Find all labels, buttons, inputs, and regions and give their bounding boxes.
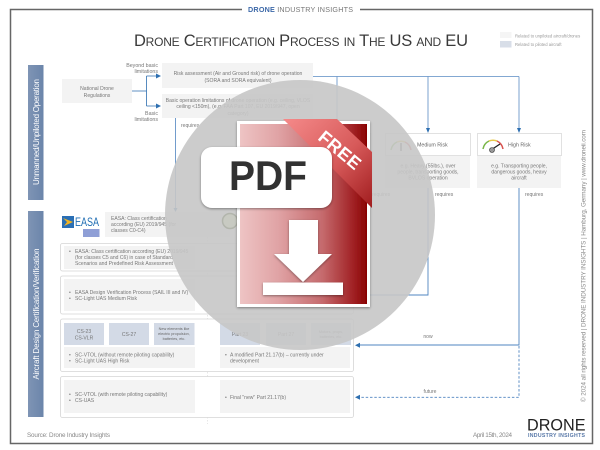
card: medium risk bbox=[385, 134, 470, 188]
text: SC-VTOL without remote piloting: SC-Light UAS High Risk bbox=[75, 358, 130, 364]
text: SC-VTOL without remote piloting: SC-VTOL (without remote piloting capability) bbox=[75, 352, 175, 358]
box: EASA class certification: classes C0-C4) bbox=[111, 228, 146, 234]
label: future: future bbox=[424, 389, 437, 395]
box: basic operation limitations: category) bbox=[227, 111, 249, 117]
box: basic operation limitations bbox=[162, 94, 313, 118]
arrow: future bbox=[355, 395, 360, 400]
arrow: beyond basic branch bbox=[156, 74, 161, 78]
box: basic operation limitations: ceiling <150m), (e.g. FAA Part 107, EU 2019/947, open bbox=[176, 104, 300, 110]
box: risk assessment: Risk assessment (Air and Ground risk) of drone operation bbox=[174, 71, 303, 77]
text: SC-VTOL without remote piloting: • bbox=[69, 352, 71, 358]
flow lines from risk assessment bbox=[313, 76, 519, 130]
national drone regulations box bbox=[62, 79, 132, 103]
sidebar: unmanned operation bbox=[28, 65, 44, 200]
title: Drone Certification Process in The US and EU bbox=[134, 32, 468, 50]
date: April 15th, 2024 bbox=[473, 432, 512, 439]
card: high risk: aircraft bbox=[511, 176, 527, 182]
spec box: new elements US: batteries, etc. bbox=[320, 335, 342, 339]
PDF label: PDF bbox=[229, 152, 307, 199]
text: final new Part 21.17(b): Final "new" Part 21.17(b) bbox=[230, 395, 286, 401]
box: basic operation limitations: Basic operation limitations of drone operation (e.g. ceiling, VLOS bbox=[166, 98, 311, 104]
spec box: new elements US bbox=[311, 323, 351, 345]
text: SC-VTOL with remote piloting: • bbox=[69, 392, 71, 398]
card: medium risk: Medium Risk bbox=[417, 142, 448, 148]
vertical copyright line: © 2024 all rights reserved | DRONE INDUSTRY INSIGHTS | Hamburg, Germany | www.droneii.com bbox=[580, 130, 588, 402]
card: medium risk: BVLOS operation bbox=[408, 176, 448, 182]
box: EASA class certification: according (EU) 2019/945 (for bbox=[111, 222, 176, 228]
flow line: medium risk requires bbox=[360, 188, 428, 295]
row: standard scenarios bbox=[60, 244, 354, 271]
text: modified Part 21.17(b): • bbox=[225, 352, 227, 358]
spec box: CS-23 bbox=[64, 323, 104, 345]
label: requires (low): requires bbox=[372, 192, 391, 198]
label: basic limitations bbox=[134, 111, 158, 123]
card: medium risk: e.g. Heavy (55lbs.), over bbox=[401, 164, 456, 170]
text: final new Part 21.17(b): • bbox=[225, 395, 227, 401]
row: standard scenarios: Scenarios and Predefined Risk Assessment bbox=[75, 261, 174, 267]
flow line: high risk requires, now bbox=[357, 188, 519, 345]
text: SC-VTOL with remote piloting bbox=[64, 380, 195, 413]
spec box: CS-23: CS-VLR bbox=[75, 336, 94, 342]
card: high risk: e.g. Transporting people, bbox=[491, 164, 547, 170]
EASA logo: EASA bbox=[75, 215, 99, 229]
spec box: new elements: electric propulsion, bbox=[158, 332, 190, 336]
text: modified Part 21.17(b): development bbox=[230, 358, 259, 364]
text: modified Part 21.17(b) bbox=[220, 347, 350, 368]
box: risk assessment bbox=[162, 63, 313, 88]
arrow: to low risk bbox=[335, 129, 339, 133]
FREE ribbon: FREE bbox=[314, 127, 365, 174]
sidebar: unmanned operation: Unmanned/Unpiloted Operation bbox=[32, 79, 41, 185]
legend bbox=[500, 32, 580, 48]
card: high risk: dangerous goods, heavy bbox=[491, 170, 547, 176]
row: standard scenarios: EASA: Class certification according (EU) 2019/945 bbox=[75, 249, 189, 255]
row: design verification: • bbox=[69, 290, 71, 296]
legend: Related to unpiloted aircraft/drones bbox=[515, 34, 580, 38]
box: EASA class certification: EASA: Class certification bbox=[111, 216, 167, 222]
national drone regulations box: National Drone bbox=[80, 86, 114, 92]
spec box: Part 23 bbox=[220, 323, 260, 345]
label: requires (high): requires bbox=[525, 192, 544, 198]
logo: INDUSTRY INSIGHTS bbox=[528, 433, 586, 439]
arrow: to medium risk bbox=[426, 128, 430, 133]
FREE ribbon bbox=[283, 119, 372, 208]
text: SC-VTOL with remote piloting: CS-UAS bbox=[75, 398, 95, 404]
divider between EU and US columns bbox=[206, 222, 208, 424]
spec box: Part 23: Part 23 bbox=[232, 332, 248, 338]
row: design verification bbox=[60, 276, 354, 314]
card: low risk bbox=[293, 134, 371, 188]
connector: regulations to branches bbox=[132, 76, 160, 106]
spec box: CS-27 bbox=[109, 323, 149, 345]
arrow: now bbox=[355, 343, 360, 348]
PDF document page bbox=[237, 121, 370, 307]
box: EASA class certification bbox=[105, 212, 230, 237]
spec box: Part 27: Part 27 bbox=[278, 332, 294, 338]
label: basic limitations: Basic bbox=[145, 111, 158, 117]
PDF label bbox=[201, 147, 332, 208]
arrow: to high risk bbox=[517, 128, 521, 133]
sidebar: aircraft design certification: Aircraft Design Certification/Verification bbox=[32, 248, 41, 380]
icon: medium risk gauge bbox=[391, 141, 411, 151]
row: design verification: • bbox=[69, 296, 71, 302]
spec box: Part 27 bbox=[266, 323, 306, 345]
card: high risk bbox=[477, 134, 562, 188]
sidebar: aircraft design certification bbox=[28, 211, 44, 417]
text: modified Part 21.17(b): A modified Part 21.17(b) – currently under bbox=[230, 352, 324, 358]
label: beyond basic limitations bbox=[126, 63, 158, 75]
text: SC-VTOL without remote piloting bbox=[64, 347, 195, 368]
row: standard scenarios: • bbox=[69, 249, 71, 255]
arrow: to EASA class certification bbox=[174, 208, 178, 212]
card: medium risk: people, transporting goods, bbox=[397, 170, 459, 176]
EASA logo bbox=[62, 215, 100, 237]
label: now: now bbox=[423, 334, 433, 340]
text: SC-VTOL without remote piloting: • bbox=[69, 358, 71, 364]
PDF overlay badge bbox=[165, 80, 435, 350]
text: SC-VTOL with remote piloting: SC-VTOL (with remote piloting capability) bbox=[75, 392, 168, 398]
spec box: CS-23: CS-23 bbox=[77, 329, 91, 335]
arrow: basic branch bbox=[156, 104, 161, 108]
label: beyond basic limitations: Beyond basic bbox=[126, 63, 158, 69]
legend: Related to piloted aircraft bbox=[515, 42, 562, 47]
line: basic limitations down to EASA bbox=[174, 118, 176, 209]
icon: high risk gauge bbox=[483, 140, 503, 152]
spec box: new elements bbox=[154, 323, 194, 345]
grey circle bbox=[165, 80, 435, 350]
flow line: low risk requires bbox=[336, 188, 338, 240]
row: certification specifications bbox=[60, 319, 354, 372]
icon: download arrow bbox=[263, 220, 343, 295]
spec box: new elements US: Motors, props, bbox=[319, 330, 343, 334]
flow line: future (dashed) bbox=[358, 346, 519, 397]
row: future certification bbox=[60, 376, 354, 418]
text: SC-VTOL with remote piloting: • bbox=[69, 398, 71, 404]
box: risk assessment: (SORA and SORA equivalent) bbox=[204, 78, 272, 84]
label: requires (medium): requires bbox=[435, 192, 454, 198]
header brand: DRONE INDUSTRY INSIGHTS bbox=[248, 5, 353, 14]
text: final new Part 21.17(b) bbox=[220, 380, 350, 413]
row: standard scenarios: (for classes C5 and C6) in case of Standard bbox=[75, 255, 173, 261]
label: beyond basic limitations: limitations bbox=[134, 69, 158, 75]
row: design verification: SC-Light UAS Medium Risk bbox=[75, 296, 137, 302]
national drone regulations box: Regulations bbox=[84, 93, 111, 99]
logo: DRONE bbox=[527, 416, 586, 434]
row: design verification: EASA Design Verification Process (SAIL III and IV) bbox=[75, 290, 188, 296]
card: low risk: Low Risk bbox=[321, 143, 343, 149]
card: high risk: High Risk bbox=[508, 142, 531, 148]
label: basic limitations: limitations bbox=[134, 117, 158, 123]
source: Source: Drone Industry Insights bbox=[27, 432, 110, 439]
spec box: new elements: batteries, etc. bbox=[163, 337, 185, 341]
spec box: CS-27: CS-27 bbox=[122, 332, 136, 338]
spec box: new elements: New elements like bbox=[159, 327, 189, 331]
icon: faint gauge behind overlay bbox=[222, 214, 238, 228]
label: requires (basic): requires bbox=[181, 123, 200, 129]
